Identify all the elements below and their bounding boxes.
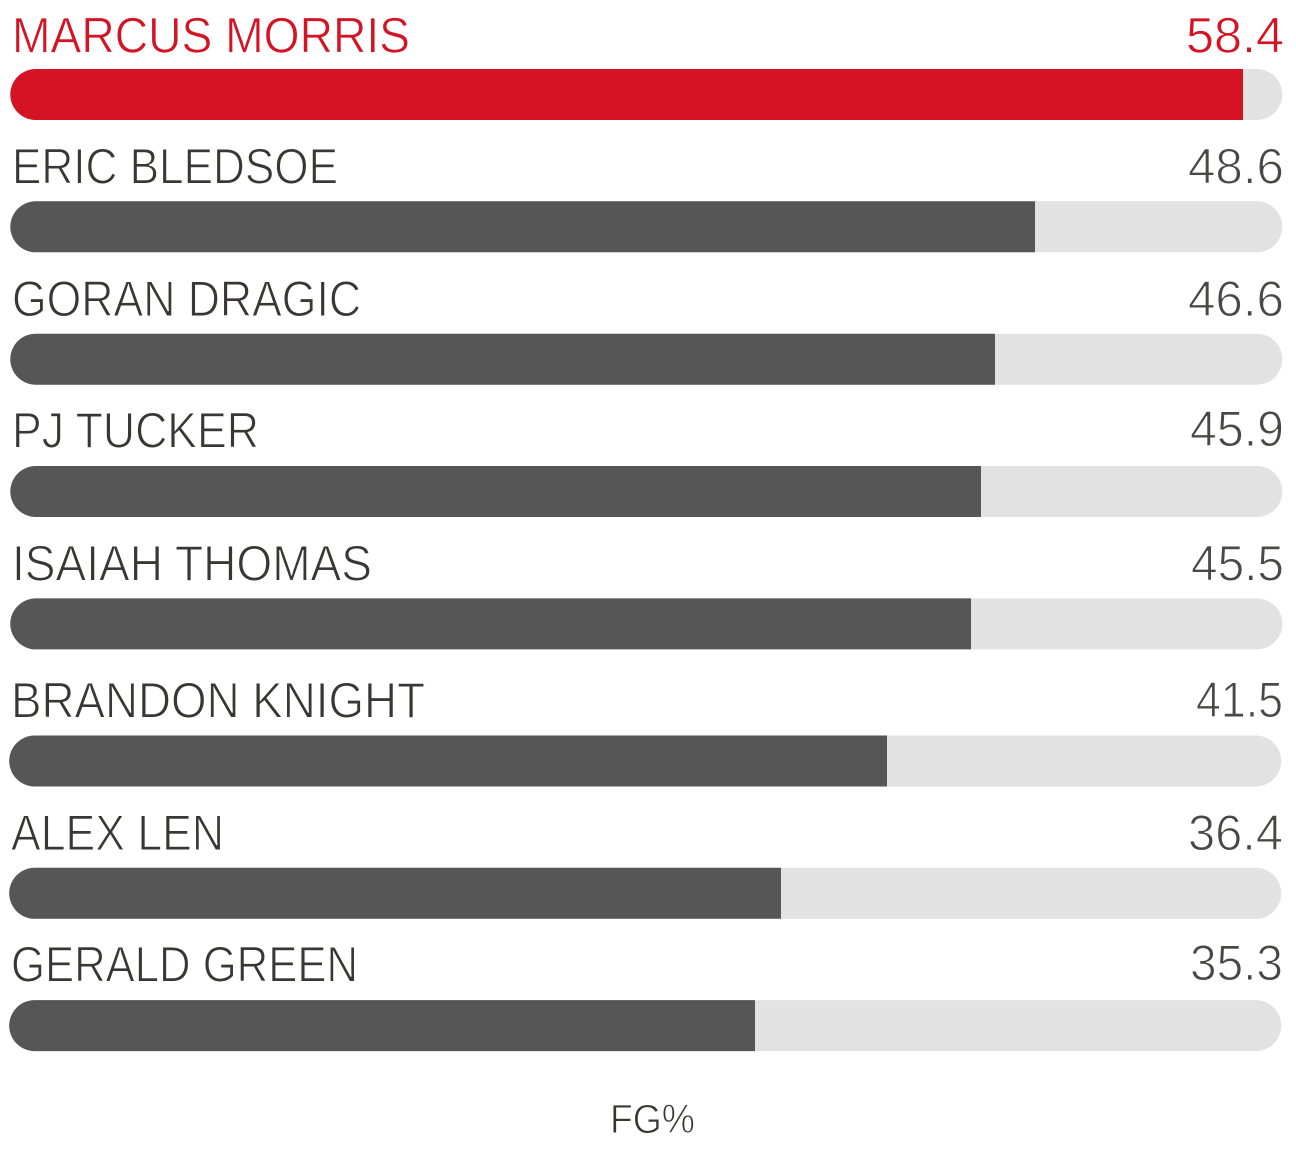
axis label: FG%: FG% bbox=[610, 1096, 695, 1142]
row: Marcus Morris: 58.4 bbox=[1186, 8, 1284, 64]
row: Goran Dragic bbox=[10, 271, 1284, 385]
row: Gerald Green bbox=[9, 935, 1283, 1051]
row: Isaiah Thomas: ISAIAH THOMAS bbox=[12, 536, 372, 592]
row: Goran Dragic: 46.6 bbox=[1188, 271, 1284, 327]
row: Marcus Morris: MARCUS MORRIS bbox=[12, 8, 410, 64]
row: Goran Dragic: GORAN DRAGIC bbox=[12, 271, 361, 327]
row: Alex Len: 36.4 bbox=[1188, 805, 1283, 861]
row: Isaiah Thomas bbox=[10, 536, 1284, 649]
row: Brandon Knight: BRANDON KNIGHT bbox=[11, 672, 425, 728]
row: Eric Bledsoe: ERIC BLEDSOE bbox=[12, 138, 338, 194]
row: Alex Len bbox=[9, 805, 1283, 919]
row: Brandon Knight: 41.5 bbox=[1196, 672, 1283, 728]
row: Alex Len: ALEX LEN bbox=[11, 805, 224, 861]
row: Eric Bledsoe bbox=[10, 138, 1284, 252]
row: Gerald Green: GERALD GREEN bbox=[11, 936, 358, 992]
row: Gerald Green: 35.3 bbox=[1190, 935, 1283, 991]
row: Eric Bledsoe: 48.6 bbox=[1188, 138, 1284, 194]
row: Marcus Morris bbox=[10, 8, 1284, 120]
row: Brandon Knight bbox=[9, 672, 1283, 786]
row: PJ Tucker: 45.9 bbox=[1190, 401, 1284, 457]
row: Isaiah Thomas: 45.5 bbox=[1191, 536, 1284, 592]
row: PJ Tucker bbox=[10, 401, 1284, 517]
row: PJ Tucker: PJ TUCKER bbox=[12, 402, 259, 458]
